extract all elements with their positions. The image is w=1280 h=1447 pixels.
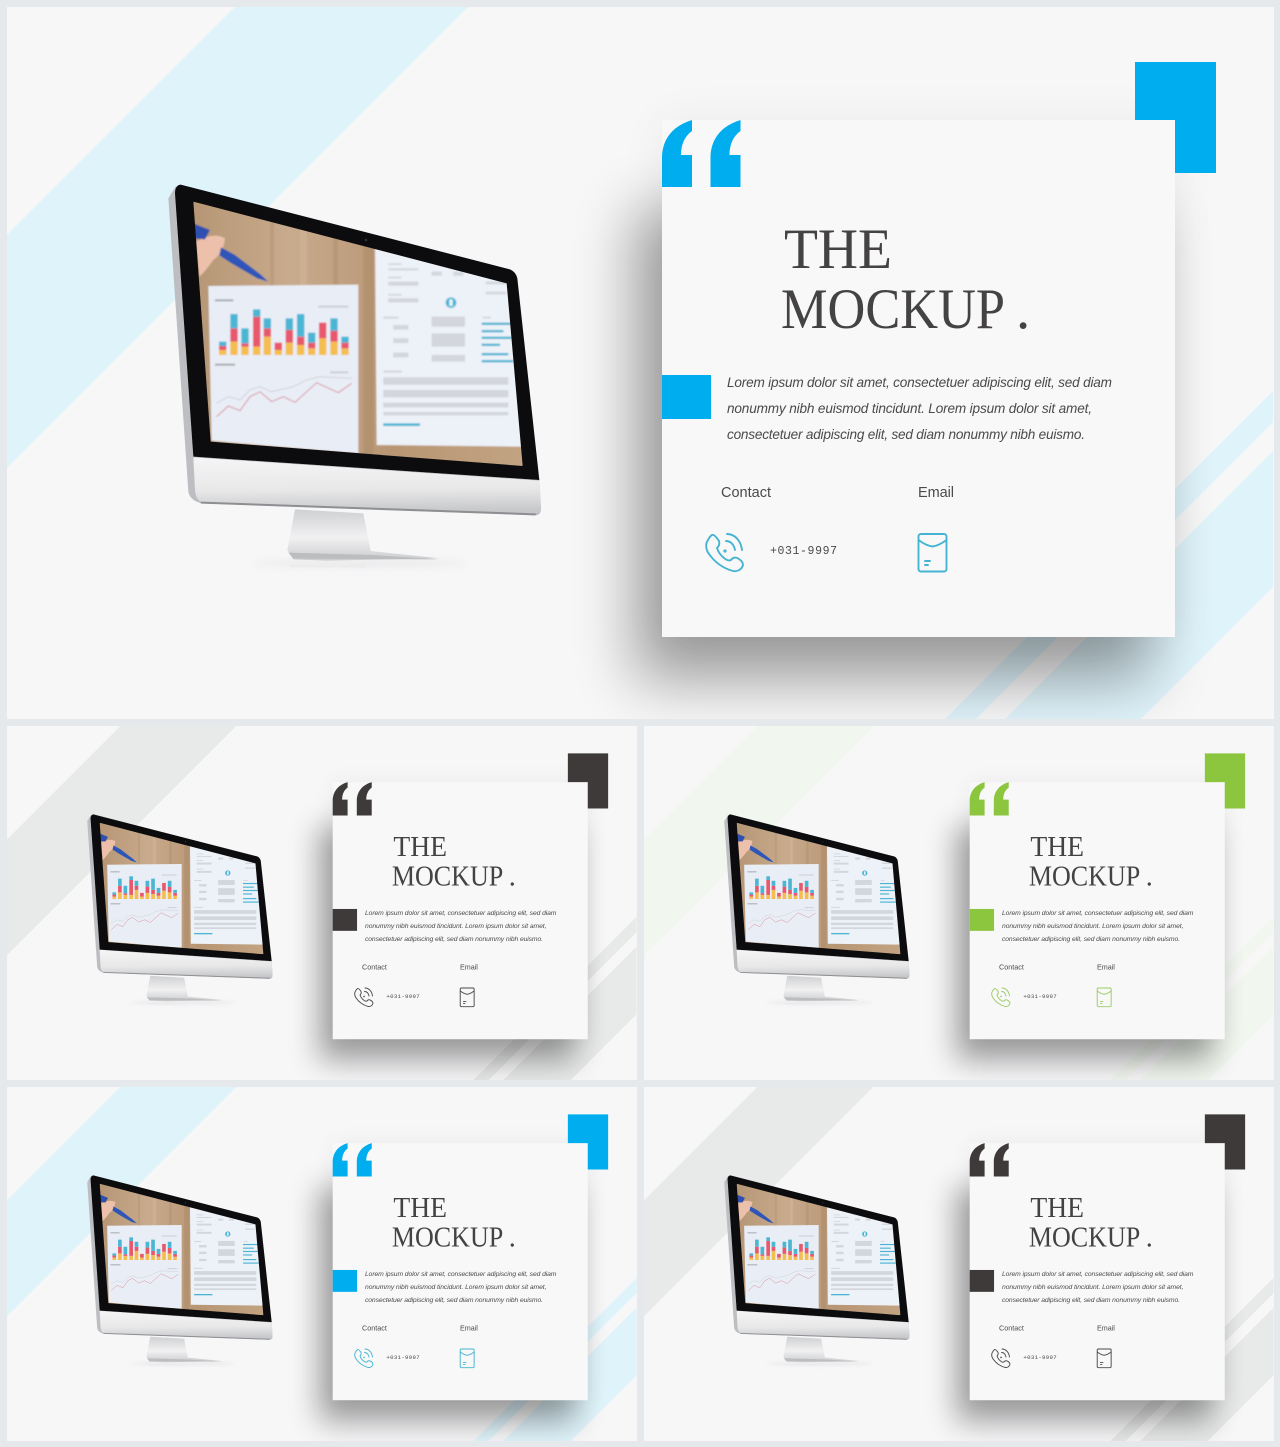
phone number: +031-9997: [1023, 993, 1057, 1000]
corner accent: [1135, 62, 1216, 173]
title: MOCKUP: [392, 1223, 503, 1254]
monitor mockup: [87, 1175, 273, 1366]
panel: slide variant, green theme: [644, 726, 1274, 1080]
title: .: [1146, 1223, 1153, 1254]
panel: slide variant, dark theme: [7, 726, 637, 1080]
monitor mockup: [168, 185, 541, 567]
icon: envelope: [460, 988, 474, 1007]
corner accent: [568, 753, 608, 809]
phone number: +031-9997: [1023, 1354, 1057, 1361]
title: MOCKUP: [1029, 862, 1140, 893]
square accent: [970, 1270, 994, 1292]
email label: Email: [1097, 1324, 1115, 1333]
body text: Lorem ipsum dolor sit amet, consectetuer adipiscing elit, sed diam: [727, 375, 1112, 390]
square accent: [333, 909, 357, 931]
body text: consectetuer adipiscing elit, sed diam nonummy nibh euismo.: [727, 427, 1085, 442]
quote mark: [970, 1143, 1009, 1176]
title: .: [509, 862, 516, 893]
contact label: Contact: [999, 1324, 1024, 1333]
body text: consectetuer adipiscing elit, sed diam nonummy nibh euismo.: [1002, 936, 1180, 943]
panel: slide variant, blue theme: [7, 1087, 637, 1441]
panel: main slide, blue theme: [7, 7, 1274, 719]
icon: phone: [355, 988, 373, 1007]
title: .: [1016, 278, 1030, 341]
icon: envelope: [1097, 1349, 1111, 1368]
title: THE: [393, 832, 447, 863]
monitor mockup: [87, 814, 273, 1005]
card: the mockup: [970, 753, 1245, 1039]
quote mark: [662, 120, 740, 187]
contact label: Contact: [362, 963, 387, 972]
body text: consectetuer adipiscing elit, sed diam nonummy nibh euismo.: [365, 936, 543, 943]
card: the mockup: [970, 1114, 1245, 1400]
email label: Email: [460, 1324, 478, 1333]
title: THE: [393, 1193, 447, 1224]
monitor mockup: [724, 1175, 910, 1366]
icon: envelope: [918, 534, 946, 572]
quote mark: [970, 782, 1009, 815]
title: [1029, 832, 1153, 893]
email label: Email: [460, 963, 478, 972]
square accent: [970, 909, 994, 931]
body text: [727, 375, 1112, 442]
corner accent: [1205, 1114, 1245, 1170]
body text: Lorem ipsum dolor sit amet, consectetuer adipiscing elit, sed diam: [1002, 1271, 1194, 1278]
icon: phone: [355, 1349, 373, 1368]
body text: consectetuer adipiscing elit, sed diam nonummy nibh euismo.: [365, 1297, 543, 1304]
body text: [365, 910, 557, 943]
title: .: [1146, 862, 1153, 893]
title: [392, 832, 516, 893]
body text: [1002, 910, 1194, 943]
contact label: Contact: [999, 963, 1024, 972]
body text: Lorem ipsum dolor sit amet, consectetuer adipiscing elit, sed diam: [365, 1271, 557, 1278]
title: [392, 1193, 516, 1254]
icon: envelope: [1097, 988, 1111, 1007]
body text: [365, 1271, 557, 1304]
body text: Lorem ipsum dolor sit amet, consectetuer adipiscing elit, sed diam: [365, 910, 557, 917]
panel: slide variant, dark theme 2: [644, 1087, 1274, 1441]
corner accent: [568, 1114, 608, 1170]
title: [1029, 1193, 1153, 1254]
body text: nonummy nibh euismod tincidunt. Lorem ipsum dolor sit amet,: [365, 1284, 547, 1291]
body text: nonummy nibh euismod tincidunt. Lorem ipsum dolor sit amet,: [727, 401, 1092, 416]
icon: phone: [992, 1349, 1010, 1368]
body text: nonummy nibh euismod tincidunt. Lorem ipsum dolor sit amet,: [365, 923, 547, 930]
quote mark: [333, 1143, 372, 1176]
title: THE: [1030, 1193, 1084, 1224]
body text: nonummy nibh euismod tincidunt. Lorem ipsum dolor sit amet,: [1002, 1284, 1184, 1291]
email label: Email: [1097, 963, 1115, 972]
title: .: [509, 1223, 516, 1254]
title: THE: [784, 218, 892, 281]
card: the mockup: [333, 753, 608, 1039]
phone number: +031-9997: [386, 993, 420, 1000]
icon: phone: [706, 534, 743, 571]
square accent: [662, 375, 711, 419]
contact label: Contact: [721, 485, 771, 501]
title: [781, 218, 1030, 341]
email label: Email: [918, 485, 954, 501]
body text: consectetuer adipiscing elit, sed diam nonummy nibh euismo.: [1002, 1297, 1180, 1304]
title: MOCKUP: [781, 278, 1005, 341]
phone number: +031-9997: [386, 1354, 420, 1361]
title: MOCKUP: [1029, 1223, 1140, 1254]
icon: envelope: [460, 1349, 474, 1368]
body text: nonummy nibh euismod tincidunt. Lorem ipsum dolor sit amet,: [1002, 923, 1184, 930]
square accent: [333, 1270, 357, 1292]
icon: phone: [992, 988, 1010, 1007]
quote mark: [333, 782, 372, 815]
card: the mockup: [662, 62, 1216, 637]
body text: Lorem ipsum dolor sit amet, consectetuer adipiscing elit, sed diam: [1002, 910, 1194, 917]
title: THE: [1030, 832, 1084, 863]
monitor mockup: [724, 814, 910, 1005]
corner accent: [1205, 753, 1245, 809]
phone number: +031-9997: [770, 545, 837, 558]
title: MOCKUP: [392, 862, 503, 893]
card: the mockup: [333, 1114, 608, 1400]
contact label: Contact: [362, 1324, 387, 1333]
body text: [1002, 1271, 1194, 1304]
